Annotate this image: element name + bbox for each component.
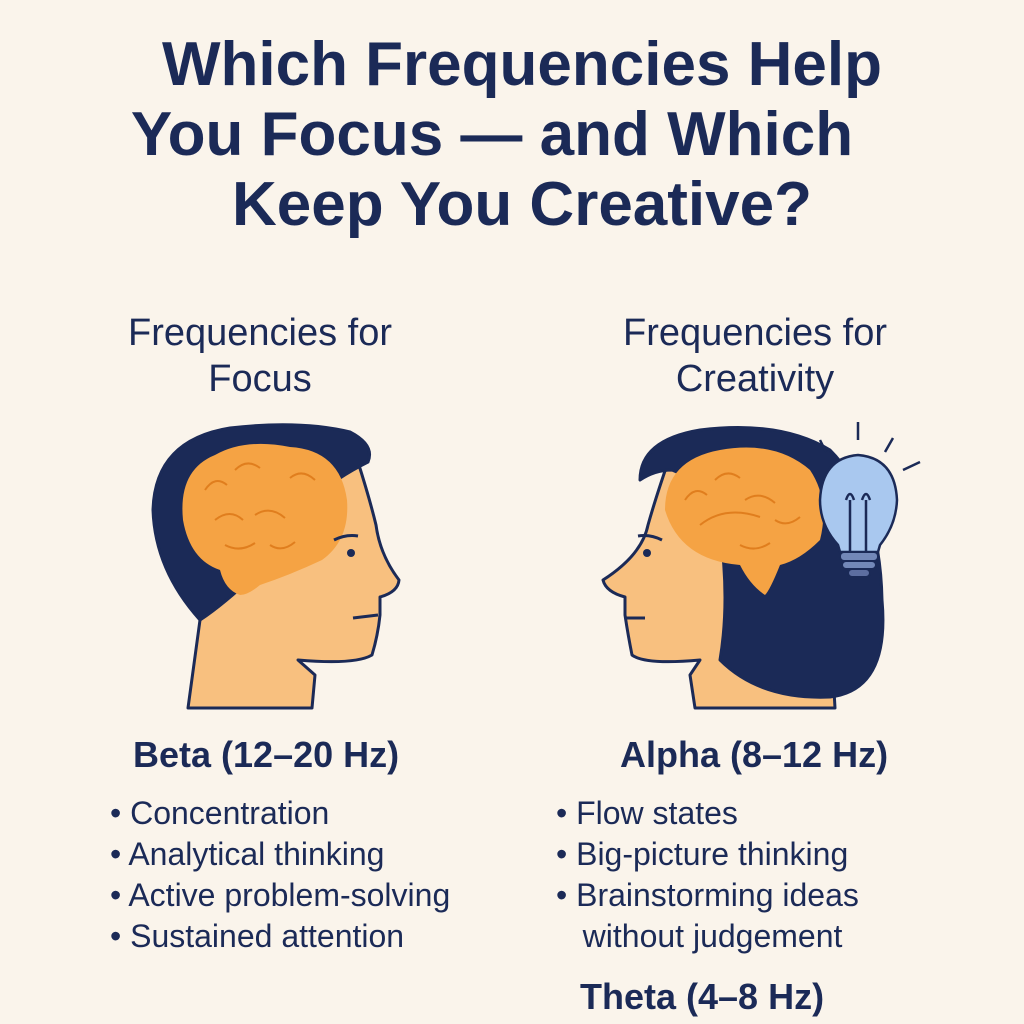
heading: theta: Theta (4–8 Hz) <box>580 976 824 1017</box>
title: Which Frequencies Help <box>162 30 882 99</box>
heading: focus: Focus <box>208 358 312 400</box>
heading: alpha: Alpha (8–12 Hz) <box>620 734 888 775</box>
heading: beta: Beta (12–20 Hz) <box>133 734 399 775</box>
lightbulb <box>820 455 897 552</box>
list: focus benefits <box>110 795 450 954</box>
heading: focus <box>128 312 392 400</box>
list: focus benefits: • Analytical thinking <box>110 836 384 872</box>
title: You Focus — and Which <box>131 100 853 169</box>
list: focus benefits: • Concentration <box>110 795 329 831</box>
title: Keep You Creative? <box>232 170 812 239</box>
heading: creativity: Frequencies for <box>623 312 887 354</box>
heading: focus: Frequencies for <box>128 312 392 354</box>
list: creativity benefits: • Big-picture thinking <box>556 836 848 872</box>
panel: focus bands <box>110 734 450 954</box>
heading: creativity <box>623 312 887 400</box>
panel: creativity bands <box>556 734 888 954</box>
title <box>131 30 882 239</box>
icon: male head <box>153 425 399 708</box>
heading: creativity: Creativity <box>676 358 834 400</box>
list: creativity benefits <box>556 795 859 954</box>
list: focus benefits: • Active problem-solving <box>110 877 450 913</box>
illustration: heads <box>152 422 920 710</box>
list: creativity benefits: • Brainstorming ideas <box>556 877 859 913</box>
list: focus benefits: • Sustained attention <box>110 918 404 954</box>
icon: female head with lightbulb <box>603 422 920 708</box>
list: creativity benefits: without judgement <box>583 918 842 954</box>
list: creativity benefits: • Flow states <box>556 795 738 831</box>
